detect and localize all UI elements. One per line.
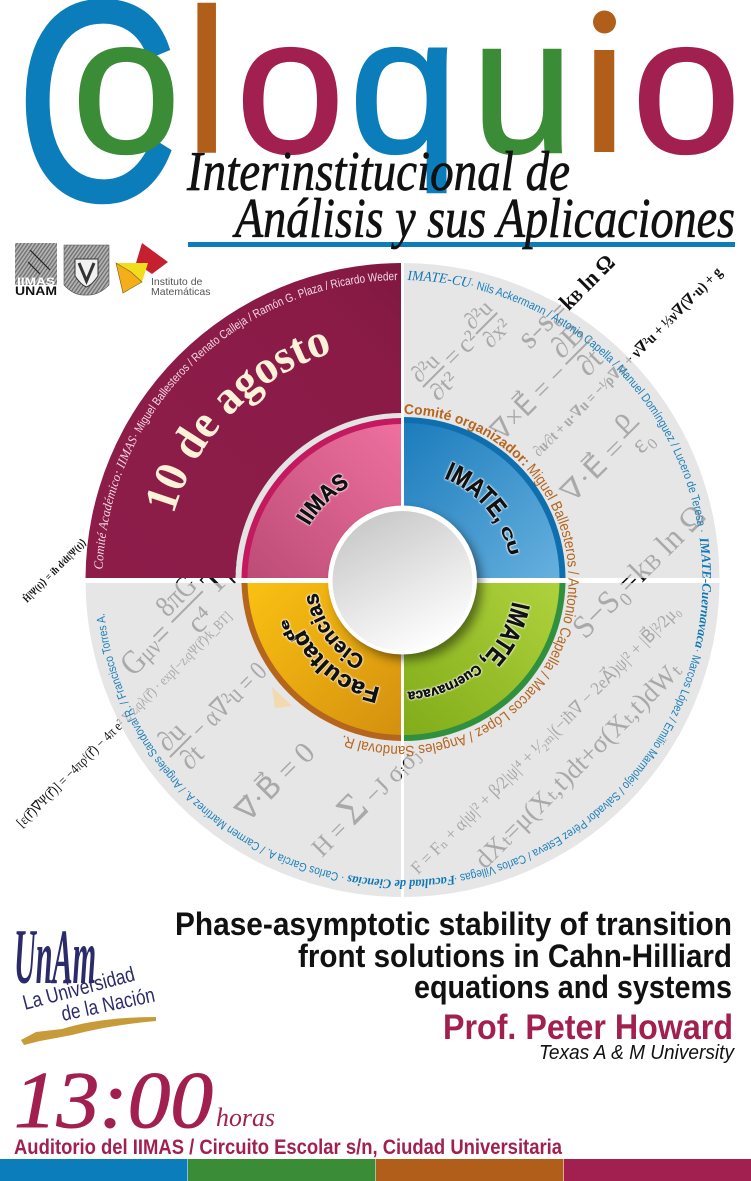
- Ciencias members: · Carlos García A. / Carmen Martínez A. / Angeles Sandoval R. / Francisco Torres A.: [96, 614, 344, 881]
- inner wheel: Facultad de Ciencias: [242, 583, 401, 741]
- overflow equations in black behind the disk: [14, 250, 726, 879]
- time: 13:00: [14, 1057, 213, 1145]
- date: 10 de agosto: 10 de agosto: [148, 334, 329, 512]
- subtitle: [186, 141, 735, 250]
- inner wheel: Facultad de Ciencias: de: [280, 618, 296, 642]
- circular text: committee members: [94, 270, 712, 889]
- inner wheel: IMATE CU: IMATE,: [443, 460, 509, 526]
- logo: IIMAS UNAM: UNAM: [15, 284, 57, 298]
- slogan line 1: La Universidad: [20, 963, 137, 1015]
- venue: Auditorio del IIMAS / Circuito Escolar s/n, Ciudad Universitaria: [14, 1136, 562, 1159]
- inner wheel: IIMAS: IIMAS: [294, 472, 350, 526]
- rounded dot of the letter i: [590, 8, 620, 38]
- slogan line 2: de la Nación: [59, 984, 157, 1026]
- time unit: horas: [216, 1103, 275, 1132]
- organizing committee names: Miguel Ballesteros / Antonio Capella / Marcos López / Angeles Sandoval R.: [344, 463, 580, 756]
- logo: UNAM La Universidad de la Nación: UnAm: [14, 913, 96, 1000]
- logo: Instituto de Matemáticas: Matemáticas: [151, 286, 211, 298]
- gold brush stroke: [21, 1017, 156, 1045]
- decorative faint triangle: [272, 687, 292, 708]
- speaker: Prof. Peter Howard: [443, 1008, 733, 1047]
- logo: IIMAS UNAM: [15, 243, 57, 298]
- affiliation: Texas A & M University: [539, 1042, 735, 1064]
- inner wheel: IMATE Cuernavaca: [404, 583, 566, 741]
- inner wheel: Facultad de Ciencias: Facultad: [288, 628, 381, 705]
- academic committee IIMAS heading: Comité Académico: IIMAS: [94, 436, 136, 569]
- decorative inner gray arc of maroon quadrant: [236, 413, 401, 578]
- inner wheel: Facultad de Ciencias: Ciencias: [305, 592, 364, 670]
- center disc shadow: [334, 512, 482, 660]
- subtitle line 1: Interinstitucional de: [186, 141, 570, 203]
- panel: gray disk quadrants: [86, 263, 720, 897]
- IMATE-Cuernavaca heading: IMATE-Cuernavaca: [695, 538, 712, 648]
- logo: IIMAS UNAM: IIMAS: [17, 276, 55, 288]
- Facultad de Ciencias heading: Facultad de Ciencias: [347, 875, 454, 889]
- inner wheel: IMATE CU: CU: [500, 525, 520, 556]
- circular text: organizing committee: [344, 404, 580, 756]
- inner wheel: IIMAS: [242, 418, 401, 578]
- bottom colour bar: [0, 1159, 751, 1181]
- logo: Instituto de Matemáticas: Instituto de: [151, 276, 203, 288]
- inner wheel: IMATE CU: [404, 417, 566, 578]
- logos: institutions: [15, 243, 211, 298]
- subtitle rule: [188, 242, 735, 247]
- IMATE-CU members: · Nils Ackermann / Antonio Capella / Manuel Domínguez / Lucero de Teresa ·: [472, 281, 704, 532]
- organizing committee heading: Comité organizador:: [404, 404, 528, 466]
- panel: date sector: [86, 263, 401, 578]
- talk title: [175, 906, 732, 1005]
- inner wheel: IMATE Cuernavaca: Cuernavaca: [406, 664, 483, 702]
- logo: UNAM shield: [64, 245, 109, 295]
- center disc: [328, 506, 477, 654]
- Cuernavaca members: · Marcos López / Emilio Marmolejo / Salvador Pérez Esteva / Carlos Villegas ·: [455, 650, 701, 880]
- faded equations on the disk: [14, 250, 726, 879]
- logo: Instituto de Matemáticas: [116, 243, 211, 298]
- IMATE-CU heading: IMATE-CU: [407, 270, 472, 287]
- inner wheel: IMATE Cuernavaca: IMATE,: [478, 600, 532, 668]
- IIMAS members: · Miguel Ballesteros / Renato Calleja / Ramón G. Plaza / Ricardo Weder: [134, 272, 398, 436]
- logo: UNAM La Universidad de la Nación: [14, 913, 157, 1045]
- title: Coloquio: [16, 0, 740, 261]
